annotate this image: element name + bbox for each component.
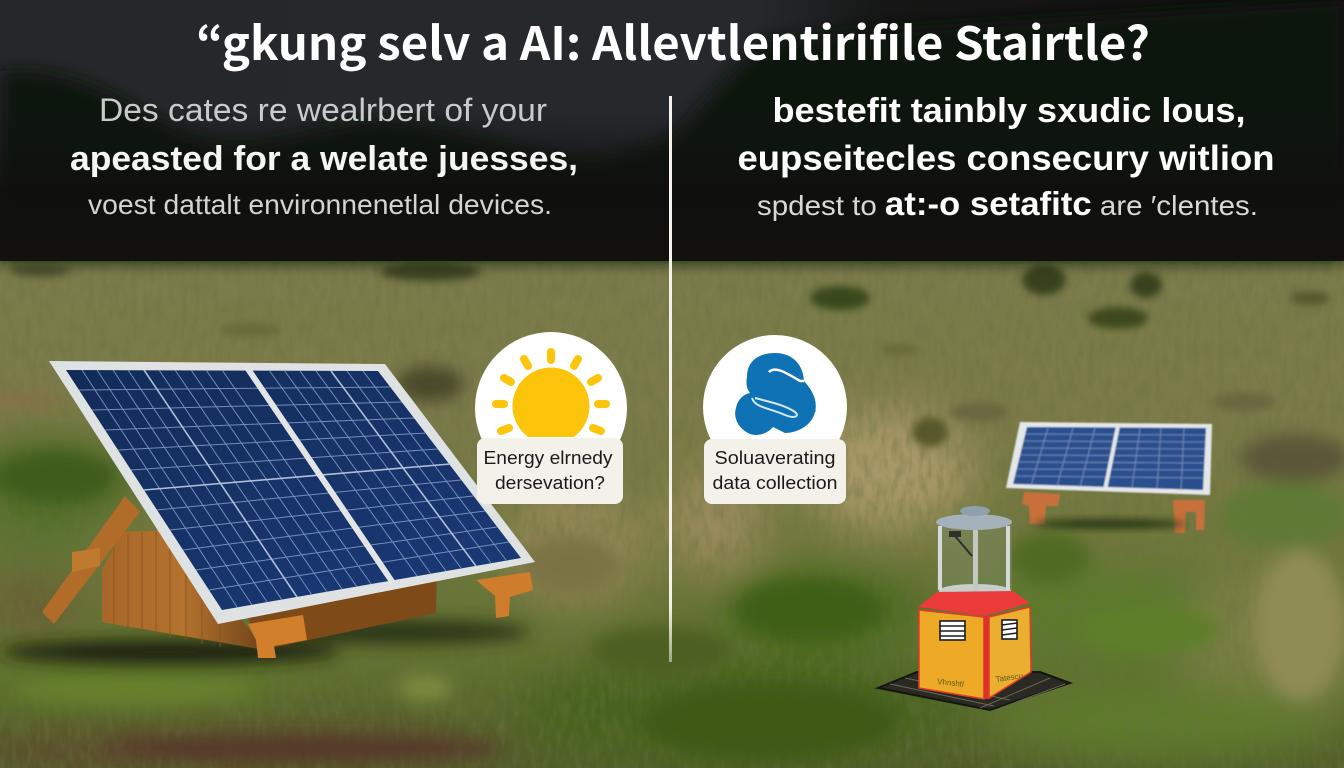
left text block: voest dattalt environnenetlal devices. — [88, 189, 552, 220]
callout: data collection: Soluaverating — [714, 448, 836, 468]
glass cylinder — [936, 506, 1012, 598]
left text block — [70, 92, 578, 220]
left text block: apeasted for a welate juesses, — [70, 140, 578, 178]
large solar panel with wooden stand — [0, 361, 535, 664]
right text block: eupseitecles consecury witlion — [738, 139, 1274, 178]
dark hills — [0, 0, 1344, 261]
title: “gkung selv a AI: Allevtlentirifile Stairtle? — [196, 8, 1150, 74]
red top — [918, 591, 1030, 616]
callout: energy: dersevation? — [495, 473, 605, 493]
callout: data collection — [703, 335, 847, 504]
right text block: spdest to at:-o setafitc are ′clentes. — [757, 185, 1258, 222]
small panel shadow — [1035, 519, 1185, 529]
panel frame and glass — [49, 361, 535, 624]
right text block — [738, 92, 1274, 222]
ground shadow — [0, 620, 530, 664]
yellow body right — [989, 607, 1031, 698]
left text block: Des cates re wealrbert of your — [99, 92, 547, 128]
callout: data collection: data collection — [712, 473, 838, 493]
header band — [0, 0, 1344, 261]
background: grassland scene — [0, 261, 1344, 768]
small solar panel — [1006, 422, 1212, 533]
mesh base mat — [878, 672, 1070, 710]
icon: blue S — [735, 353, 816, 435]
callout: energy — [475, 332, 627, 504]
sensor lantern device — [878, 506, 1070, 710]
vents — [940, 620, 1017, 640]
callout: energy: Energy elrnedy — [484, 448, 612, 468]
yellow body left — [919, 610, 984, 699]
device maker labels — [937, 671, 1024, 689]
icon: sun — [496, 352, 606, 444]
device maker labels: Vhnshtl — [937, 677, 964, 689]
wooden stand — [42, 496, 533, 658]
shrubs — [10, 263, 1330, 447]
device maker labels: Tatescu — [995, 671, 1024, 684]
cell grid — [79, 370, 509, 607]
vertical divider — [669, 96, 672, 662]
right text block: bestefit tainbly sxudic lous, — [772, 92, 1246, 130]
